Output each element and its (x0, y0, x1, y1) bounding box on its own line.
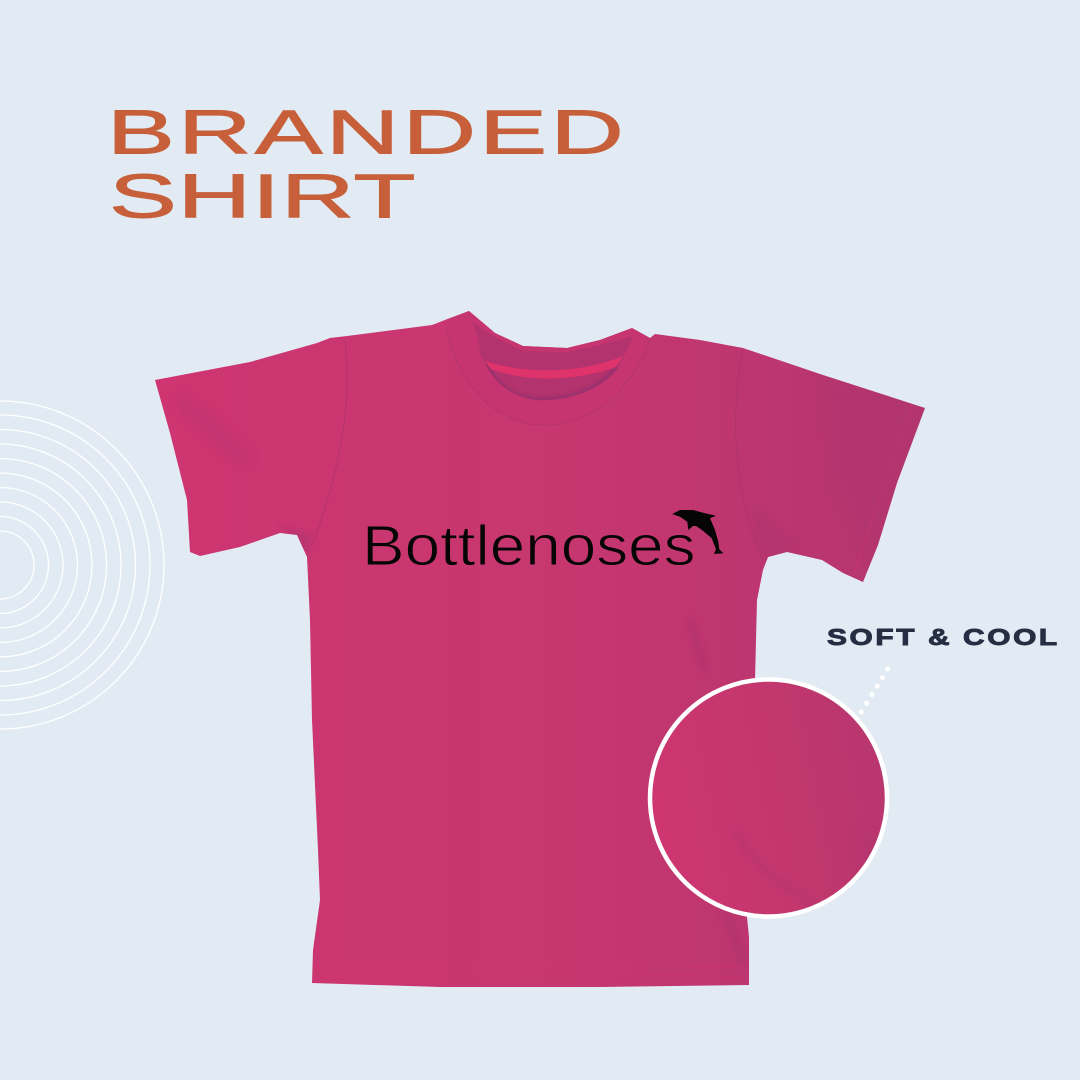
title: SHIRT (109, 162, 416, 231)
shirt logo: Bottlenoses (362, 510, 723, 577)
callout label: SOFT & COOL (827, 624, 1060, 650)
icon: dolphin (672, 510, 723, 554)
collar inner back (472, 322, 633, 374)
title: BRANDED (107, 98, 627, 167)
logo wordmark: Bottlenoses (362, 513, 696, 577)
neck label stripe (485, 356, 623, 379)
t-shirt (155, 311, 925, 987)
hem stitching (172, 385, 912, 977)
decorative concentric rings (0, 401, 164, 729)
callout dots (859, 666, 890, 714)
fabric swatch circle (650, 680, 890, 916)
title (107, 98, 627, 231)
collar band (445, 311, 650, 425)
neck opening shadow (485, 358, 623, 400)
collar seam (447, 330, 650, 425)
sleeve seams (313, 340, 347, 543)
